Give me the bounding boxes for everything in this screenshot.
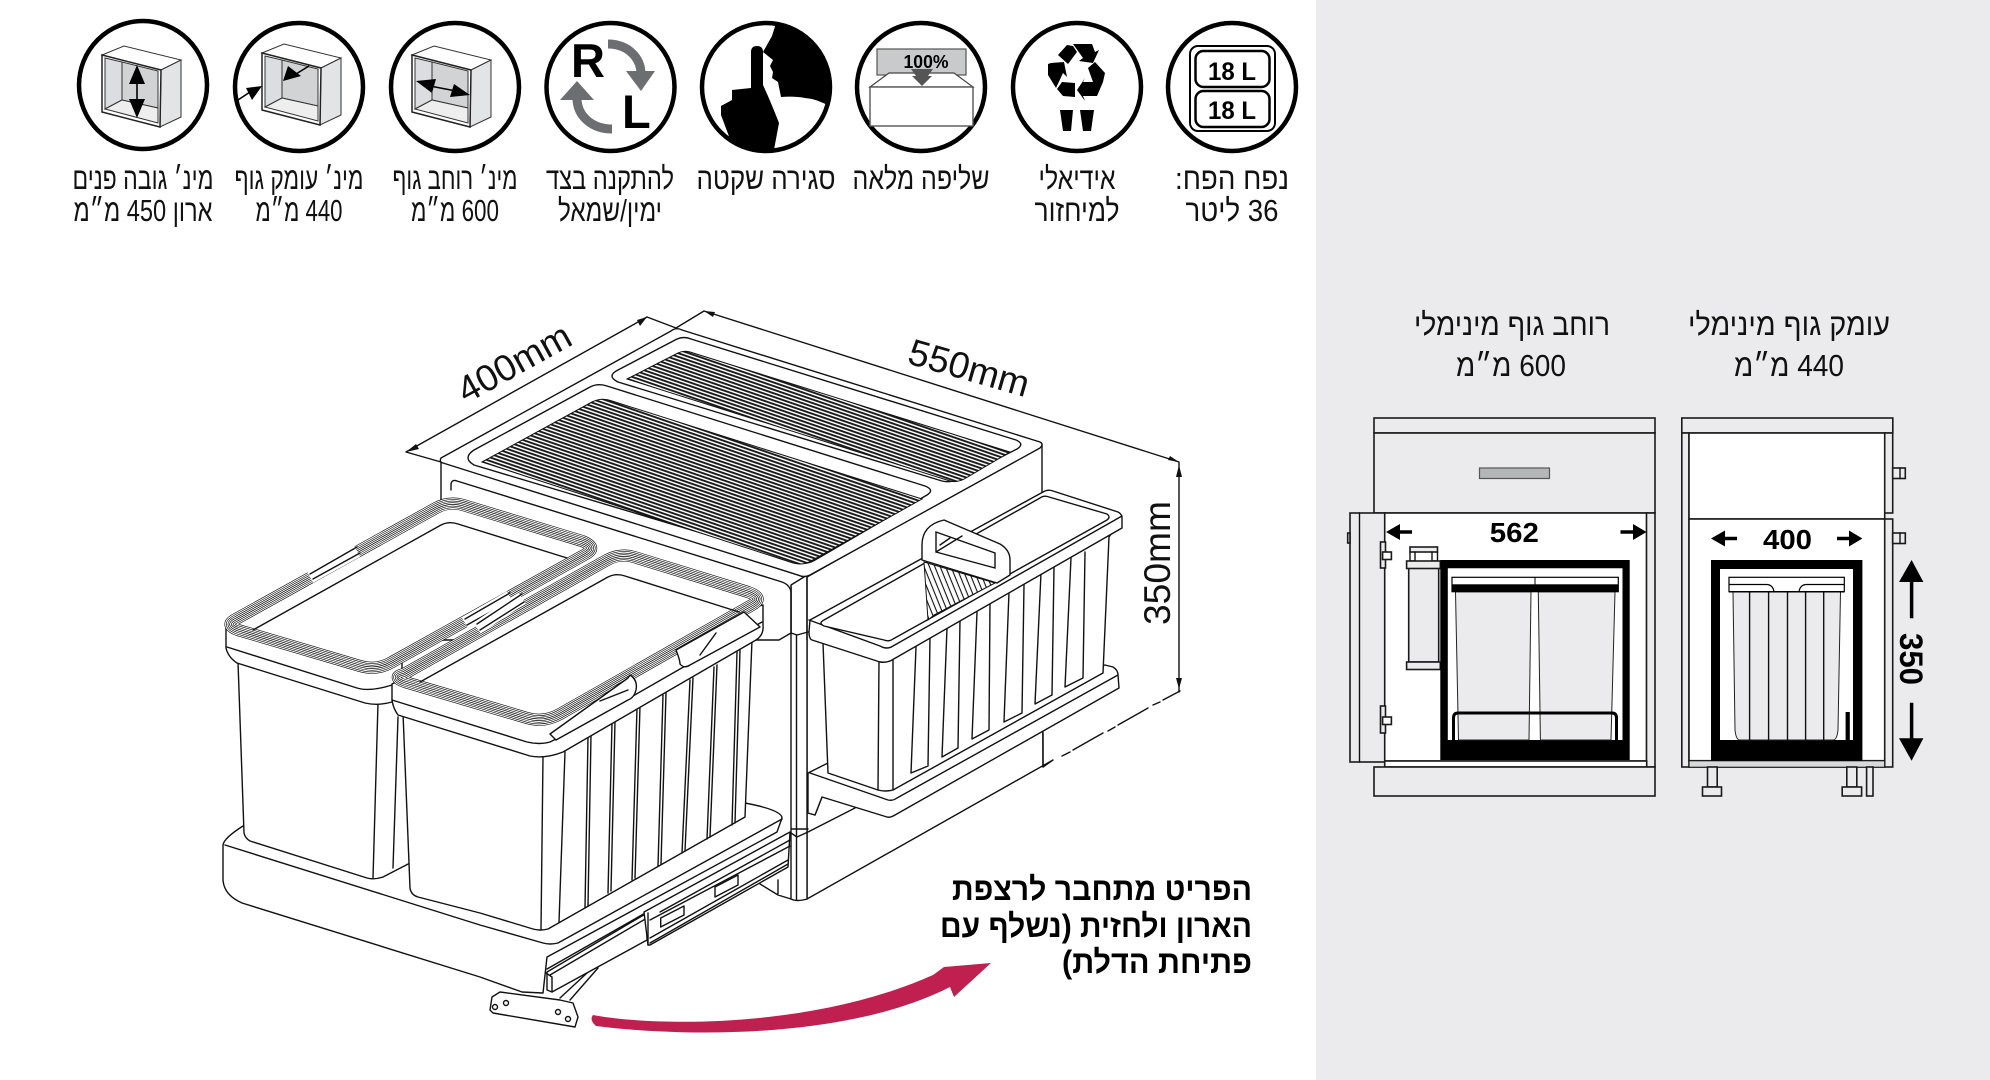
height value: 350 <box>1893 633 1929 685</box>
dimension label: 350mm: 350mm <box>1137 501 1178 625</box>
label: minimum depth: מינ׳ עומק גוף <box>234 161 364 196</box>
heading: minimum cabinet depth <box>1688 307 1890 383</box>
pull-out frame <box>1440 560 1630 760</box>
dimension label: 400mm: 400mm <box>450 315 578 411</box>
icon: right or left installation: L <box>622 85 651 138</box>
body <box>238 662 412 879</box>
heading: minimum cabinet width: 600 מ״מ <box>1456 348 1566 383</box>
right grey panel background <box>1316 0 1990 1080</box>
icon: soft close <box>702 20 840 155</box>
label: bin capacity: נפח הפח: <box>1175 161 1289 196</box>
body <box>403 640 752 930</box>
rear left bin <box>226 504 591 879</box>
icon: minimum depth <box>235 23 363 151</box>
collar <box>226 628 402 704</box>
icon: bin capacity: 18 L <box>1208 97 1256 125</box>
front recess <box>468 385 931 563</box>
width value: 562 <box>1490 517 1539 548</box>
rim handle gaps <box>310 551 357 577</box>
frame inner panel outline <box>451 480 791 633</box>
label: minimum inner height <box>72 161 214 228</box>
label: minimum depth <box>234 161 364 228</box>
note: mounting to cabinet floor and door <box>940 871 1252 980</box>
icon: recycling <box>1013 23 1141 151</box>
label: minimum width: מינ׳ רוחב גוף <box>392 161 518 196</box>
right side bin <box>809 490 1122 791</box>
label: minimum inner height: מינ׳ גובה פנים <box>72 161 214 196</box>
left bin tray <box>223 803 782 993</box>
rear recess <box>612 338 1021 482</box>
dimension lines <box>406 311 1182 756</box>
twin bins front view <box>1452 577 1618 740</box>
red curved arrow <box>592 963 991 1033</box>
drawer knobs <box>1893 468 1905 544</box>
feature icons row <box>72 20 1296 228</box>
side bin handle and divider <box>924 562 995 620</box>
label: full extension: שליפה מלאה <box>852 161 990 196</box>
top plate <box>440 329 1042 576</box>
label: soft close: סגירה שקטה <box>696 161 836 196</box>
label: minimum width: 600 מ״מ <box>411 193 499 228</box>
heading: minimum cabinet width <box>1414 307 1610 383</box>
side bin opening <box>821 496 1109 641</box>
label: recycling <box>1034 161 1120 228</box>
front view cabinet <box>1348 418 1655 796</box>
icon: full extension: 100% <box>904 52 948 72</box>
label: minimum inner height: ארון 450 מ״מ <box>74 193 213 228</box>
drawer slide rail <box>546 832 790 992</box>
door bin <box>1407 547 1440 670</box>
left handle <box>550 675 636 740</box>
icon: right or left installation: R <box>571 34 605 87</box>
label: minimum width <box>392 161 518 228</box>
icon: minimum width <box>391 23 519 151</box>
heading: minimum cabinet depth: 440 מ״מ <box>1734 348 1844 383</box>
label: recycling: למיחזור <box>1034 193 1120 228</box>
icon: bin capacity: 18 L <box>1208 58 1256 86</box>
icon: full extension <box>857 23 985 151</box>
main product illustration <box>223 311 1182 1027</box>
label: right or left installation <box>546 161 674 228</box>
frame front left side <box>441 460 804 640</box>
note: mounting to cabinet floor and door: הארון ולחזית (נשלף עם <box>940 908 1252 944</box>
depth value: 400 <box>1763 524 1812 555</box>
heading: minimum cabinet depth: עומק גוף מינימלי <box>1688 307 1890 342</box>
rim handle gap <box>477 598 522 628</box>
label: right or left installation: להתקנה בצד <box>546 161 674 196</box>
front left bin <box>392 556 763 930</box>
icon: bin capacity <box>1168 23 1296 151</box>
rim <box>398 556 758 720</box>
bin side view <box>1729 577 1850 740</box>
open door with hinges <box>1348 513 1391 762</box>
front ribbed mat <box>482 399 922 564</box>
cabinet legs <box>1702 767 1873 796</box>
right side tray <box>808 665 1119 817</box>
label: bin capacity: 36 ליטר <box>1186 193 1278 228</box>
side view cabinet <box>1682 418 1929 796</box>
height arrow <box>1899 560 1923 761</box>
label: recycling: אידיאלי <box>1038 161 1116 196</box>
door bracket <box>490 968 598 1027</box>
side bin rim <box>809 490 1122 662</box>
depth arrows <box>1711 530 1862 546</box>
note: mounting to cabinet floor and door: פתיחת הדלת) <box>1062 944 1252 980</box>
label: minimum depth: 440 מ״מ <box>256 193 342 228</box>
width arrows <box>1386 524 1646 540</box>
label: bin capacity <box>1175 161 1289 228</box>
label: right or left installation: ימין/שמאל <box>558 193 662 228</box>
rim <box>230 504 591 668</box>
heading: minimum cabinet width: רוחב גוף מינימלי <box>1414 307 1610 342</box>
drawer handle <box>1480 468 1550 478</box>
rear ribbed mat <box>627 351 1010 482</box>
ribs <box>585 650 740 908</box>
icon: right or left installation <box>546 23 674 151</box>
pull-out frame <box>1711 560 1862 761</box>
frame with lower right face <box>760 444 1053 901</box>
dimension label: 550mm: 550mm <box>904 331 1034 405</box>
right handle <box>676 612 760 667</box>
note: mounting to cabinet floor and door: הפריט מתחבר לרצפת <box>952 871 1252 907</box>
icon: minimum inner height <box>79 21 207 149</box>
collar <box>392 605 763 757</box>
